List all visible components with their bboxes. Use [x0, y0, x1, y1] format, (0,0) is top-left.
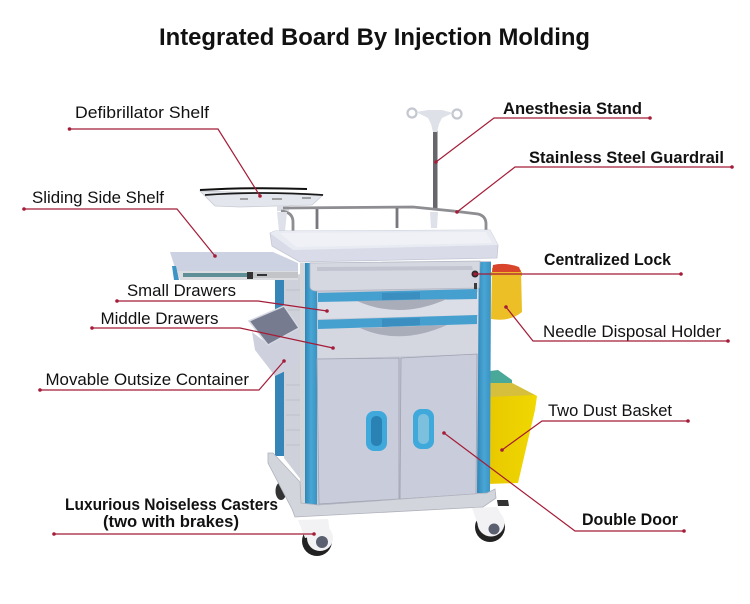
callout: anesthesia stand: Anesthesia Stand	[503, 99, 642, 118]
callout: middle drawers: Middle Drawers	[100, 309, 218, 328]
panel: cabinet body	[300, 261, 491, 507]
medical trolley illustration	[170, 108, 537, 556]
base frame	[268, 453, 496, 517]
callout: movable outsize container	[38, 359, 286, 392]
callout: two dust basket	[500, 401, 690, 452]
icon: right door handle	[413, 409, 434, 449]
panel: top tray	[270, 230, 498, 262]
callout: luxurious noiseless casters	[52, 495, 316, 536]
callout: double door	[442, 431, 686, 533]
panel: small drawer	[318, 289, 478, 319]
callout: stainless steel guardrail	[455, 148, 734, 214]
callout: needle disposal holder: Needle Disposal Holder	[543, 322, 721, 341]
icon: anesthesia stand pole and hook	[408, 108, 462, 208]
icon: left door handle	[366, 411, 387, 451]
icon: front left caster	[298, 519, 333, 556]
callout: needle disposal holder	[504, 305, 730, 343]
icon: front right caster	[472, 500, 509, 542]
panel: defibrillator shelf	[200, 188, 323, 211]
callout: small drawers: Small Drawers	[127, 281, 236, 300]
callout: movable outsize container: Movable Outsize Container	[46, 370, 249, 389]
panel: sliding side shelf	[170, 252, 298, 280]
panel: lock drawer	[310, 261, 480, 297]
panel: stainless steel guardrail	[277, 207, 486, 241]
callout: luxurious noiseless casters: (two with brakes)	[103, 512, 239, 531]
callout: middle drawers	[90, 309, 335, 350]
callout: centralized lock: Centralized Lock	[544, 250, 671, 269]
callout: defibrillator shelf	[68, 103, 262, 198]
callout: two dust basket: Two Dust Basket	[548, 401, 672, 420]
callout: sliding side shelf	[22, 188, 217, 258]
callout: small drawers	[115, 281, 329, 313]
callout: luxurious noiseless casters: Luxurious Noiseless Casters	[65, 495, 278, 514]
panel: movable outsize container	[249, 306, 299, 376]
callout: anesthesia stand	[434, 99, 652, 164]
callout: centralized lock	[473, 250, 683, 276]
callout: sliding side shelf: Sliding Side Shelf	[32, 188, 164, 207]
panel: middle drawer	[318, 315, 478, 359]
icon: two dust baskets	[487, 370, 537, 484]
icon: needle disposal holder	[491, 264, 522, 320]
back caster	[276, 482, 286, 500]
callout: defibrillator shelf: Defibrillator Shelf	[75, 103, 209, 122]
side panel	[275, 272, 305, 485]
callout: double door: Double Door	[582, 510, 678, 529]
panel: double door	[317, 354, 477, 504]
title: Integrated Board By Injection Molding	[159, 24, 590, 51]
callout: stainless steel guardrail: Stainless Steel Guardrail	[529, 148, 724, 167]
